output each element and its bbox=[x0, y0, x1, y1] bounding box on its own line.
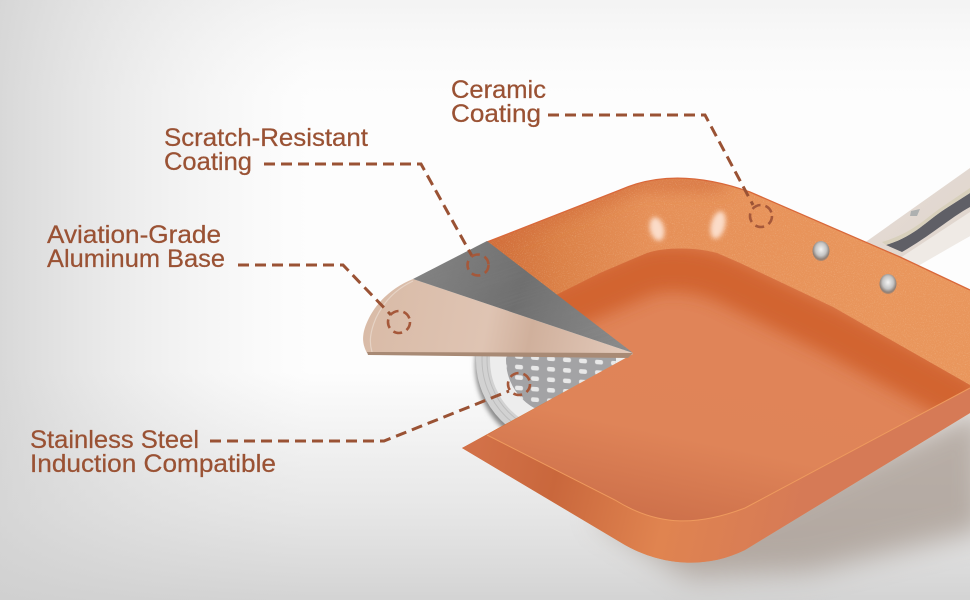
label: ceramic coating: Coating bbox=[451, 100, 541, 128]
induction disc bbox=[472, 354, 632, 428]
pan rim top edge bbox=[487, 178, 970, 290]
leader line bbox=[210, 391, 509, 441]
aluminum base wedge bbox=[363, 279, 633, 358]
pan body bbox=[462, 170, 970, 563]
target circle bbox=[750, 205, 772, 227]
label: aviation-grade aluminum base: Aluminum Base bbox=[47, 245, 225, 273]
pan floor bbox=[487, 248, 970, 521]
target circle bbox=[388, 311, 410, 333]
label: scratch-resistant coating: Coating bbox=[164, 148, 252, 176]
callout: aviation-grade aluminum base bbox=[47, 221, 410, 333]
rim glints bbox=[647, 210, 728, 242]
front wall bbox=[462, 388, 970, 563]
pan rim bbox=[462, 178, 970, 563]
leader line bbox=[548, 115, 753, 205]
target circle bbox=[508, 373, 530, 395]
label: stainless steel induction compatible: Induction Compatible bbox=[30, 450, 276, 478]
rim shading bbox=[480, 170, 970, 400]
front wall edge highlight bbox=[487, 388, 970, 521]
label: aviation-grade aluminum base: Aviation-Grade bbox=[47, 221, 221, 249]
floor shading band bbox=[540, 269, 970, 405]
leader line bbox=[264, 164, 472, 256]
label: ceramic coating: Ceramic bbox=[451, 76, 546, 104]
pan shadow bbox=[590, 405, 970, 578]
rivets bbox=[812, 241, 896, 294]
leader line bbox=[238, 265, 391, 315]
callout: scratch-resistant coating bbox=[164, 124, 488, 276]
label: stainless steel induction compatible: Stainless Steel bbox=[30, 426, 199, 454]
scratch-resistant steel wedge bbox=[413, 241, 633, 353]
callout: ceramic coating bbox=[451, 76, 772, 227]
pan handle bbox=[860, 168, 970, 266]
target circle bbox=[468, 254, 488, 276]
label: scratch-resistant coating: Scratch-Resistant bbox=[164, 124, 368, 152]
callout: stainless steel induction compatible bbox=[30, 373, 530, 478]
